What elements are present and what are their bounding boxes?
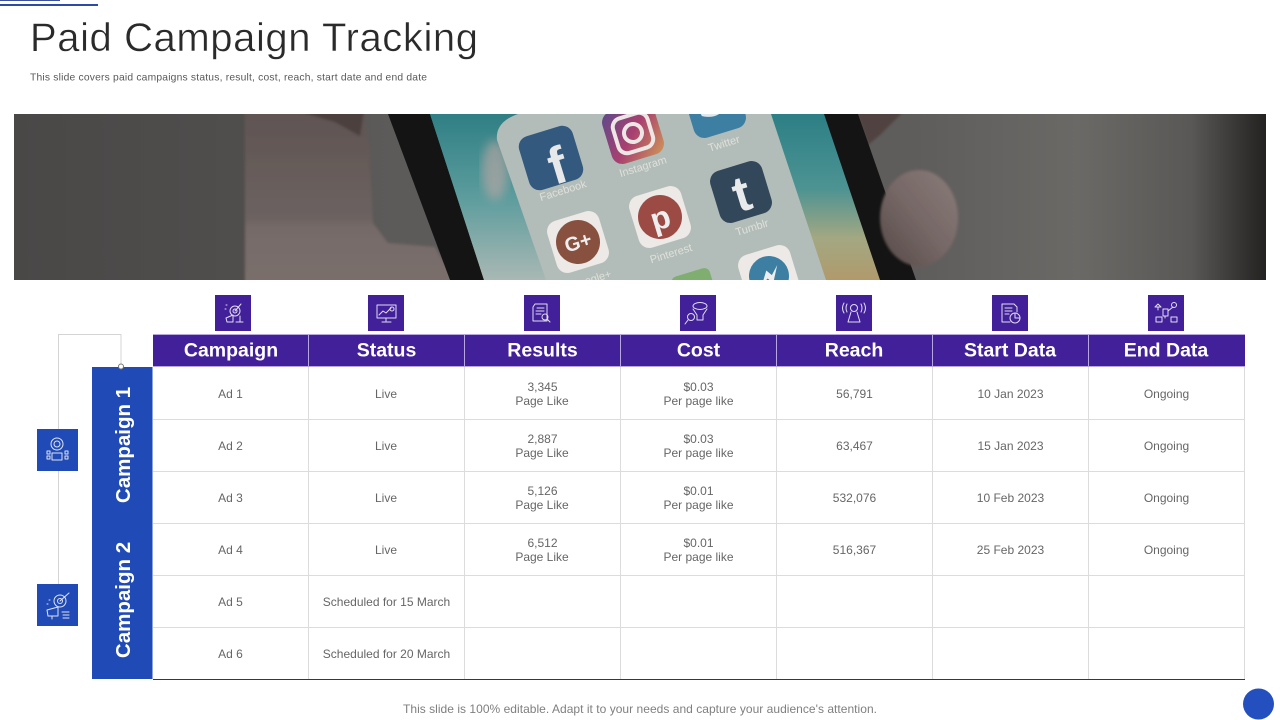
- google plus app: G+: [562, 228, 595, 257]
- row: ad 1: 10 Jan 2023: [977, 387, 1044, 401]
- photo banner: hand holding phone with social apps: [14, 114, 1266, 280]
- footer note: This slide is 100% editable. Adapt it to your needs and capture your audience's attention.: [403, 702, 877, 716]
- row: ad 2: Per page like: [663, 446, 734, 460]
- row: ad 4: 516,367: [833, 543, 877, 557]
- column icon: results document: [524, 295, 560, 331]
- row: ad 2: Ad 2: [218, 439, 243, 453]
- app folder: [497, 114, 826, 280]
- table header: Reach: [825, 340, 883, 362]
- green app: [672, 268, 712, 280]
- campaign side bar: Campaign 2: [112, 542, 135, 658]
- instagram app: [602, 114, 664, 164]
- row: ad 2: [218, 432, 1189, 460]
- row: ad 1: 3,345: [527, 380, 558, 394]
- twitter app: [689, 114, 746, 138]
- column icon: status monitor: [368, 295, 404, 331]
- row: ad 4: $0.01: [683, 536, 714, 550]
- connector lines between side icons and campaign bar: [58, 334, 124, 585]
- google plus app: [547, 211, 609, 273]
- phone body: [388, 114, 916, 280]
- row: ad 4: Live: [375, 543, 397, 557]
- row: ad 6: Scheduled for 20 March: [323, 647, 450, 661]
- row: ad 3: 10 Feb 2023: [977, 491, 1045, 505]
- row: ad 1: Ongoing: [1144, 387, 1189, 401]
- row: ad 3: Per page like: [663, 498, 734, 512]
- row: ad 4: Per page like: [663, 550, 734, 564]
- photo banner: hand holding phone with social apps: Twitter: [707, 134, 742, 155]
- column icon: start date report: [992, 295, 1028, 331]
- column icon: end date network: [1148, 295, 1184, 331]
- table header: [153, 334, 1245, 367]
- facebook app: [518, 126, 584, 190]
- row: ad 6: Ad 6: [218, 647, 243, 661]
- row: ad 1: Live: [375, 387, 397, 401]
- pinterest app: p: [646, 198, 675, 238]
- tumblr app: [710, 161, 772, 223]
- title: Paid Campaign Tracking: [30, 16, 478, 60]
- row: ad 6: [218, 647, 450, 661]
- page badge circle: [1243, 688, 1274, 720]
- tumblr app: t: [725, 165, 758, 223]
- table header: Results: [507, 340, 578, 362]
- campaign side bar: [92, 367, 152, 679]
- campaign side bar: Campaign 1: [112, 387, 135, 503]
- table header: Status: [357, 340, 416, 362]
- row: ad 2: $0.03: [683, 432, 714, 446]
- row: ad 3: 5,126: [527, 484, 558, 498]
- row: ad 3: Page Like: [515, 498, 569, 512]
- row: ad 1: $0.03: [683, 380, 714, 394]
- row: ad 3: Live: [375, 491, 397, 505]
- row: ad 3: 532,076: [833, 491, 877, 505]
- phone screen: [430, 114, 880, 280]
- row: ad 5: Scheduled for 15 March: [323, 595, 450, 609]
- photo banner: hand holding phone with social apps: Facebook: [538, 178, 588, 204]
- row: ad 2: 63,467: [836, 439, 873, 453]
- row: ad 5: [218, 595, 450, 609]
- row: ad 1: 56,791: [836, 387, 873, 401]
- side icon: campaign 2: [37, 584, 78, 626]
- photo banner: hand holding phone with social apps: Instagram: [618, 154, 668, 180]
- row: ad 1: Page Like: [515, 394, 569, 408]
- row: ad 1: Ad 1: [218, 387, 243, 401]
- row: ad 4: 25 Feb 2023: [977, 543, 1045, 557]
- hand and fingers: [245, 110, 905, 290]
- column icon: reach signal: [836, 295, 872, 331]
- top accent lines: [0, 0, 98, 6]
- facebook app: f: [541, 136, 575, 197]
- photo banner: hand holding phone with social apps: Pinterest: [649, 242, 694, 266]
- row: ad 4: Page Like: [515, 550, 569, 564]
- row: ad 2: Live: [375, 439, 397, 453]
- photo banner: hand holding phone with social apps: Tumblr: [734, 217, 770, 239]
- row: ad 4: [218, 536, 1189, 564]
- row: ad 2: 15 Jan 2023: [977, 439, 1044, 453]
- row: ad 2: Ongoing: [1144, 439, 1189, 453]
- table header: Start Data: [964, 340, 1056, 362]
- row: ad 3: Ad 3: [218, 491, 243, 505]
- row: ad 4: 6,512: [527, 536, 558, 550]
- pinterest app: [629, 186, 691, 248]
- subtitle: This slide covers paid campaigns status, result, cost, reach, start date and end date: [30, 72, 427, 84]
- row: ad 1: [218, 380, 1189, 408]
- row: ad 3: Ongoing: [1144, 491, 1189, 505]
- row: ad 3: [218, 484, 1189, 512]
- row: ad 2: 2,887: [527, 432, 558, 446]
- row: ad 4: Ongoing: [1144, 543, 1189, 557]
- column icon: cost funnel: [680, 295, 716, 331]
- table header: End Data: [1124, 340, 1208, 362]
- thumb: [880, 170, 958, 266]
- table grid: [153, 367, 1245, 679]
- row: ad 5: Ad 5: [218, 595, 243, 609]
- side icon: campaign 1: [37, 429, 78, 471]
- photo banner: hand holding phone with social apps: Google+: [569, 268, 613, 292]
- table: [153, 334, 1245, 680]
- messenger app: [738, 245, 798, 280]
- table header: Campaign: [184, 340, 278, 362]
- row: ad 2: Page Like: [515, 446, 569, 460]
- column icon: campaign target: [215, 295, 251, 331]
- table header: Cost: [677, 340, 721, 362]
- row: ad 1: Per page like: [663, 394, 734, 408]
- row: ad 3: $0.01: [683, 484, 714, 498]
- row: ad 4: Ad 4: [218, 543, 243, 557]
